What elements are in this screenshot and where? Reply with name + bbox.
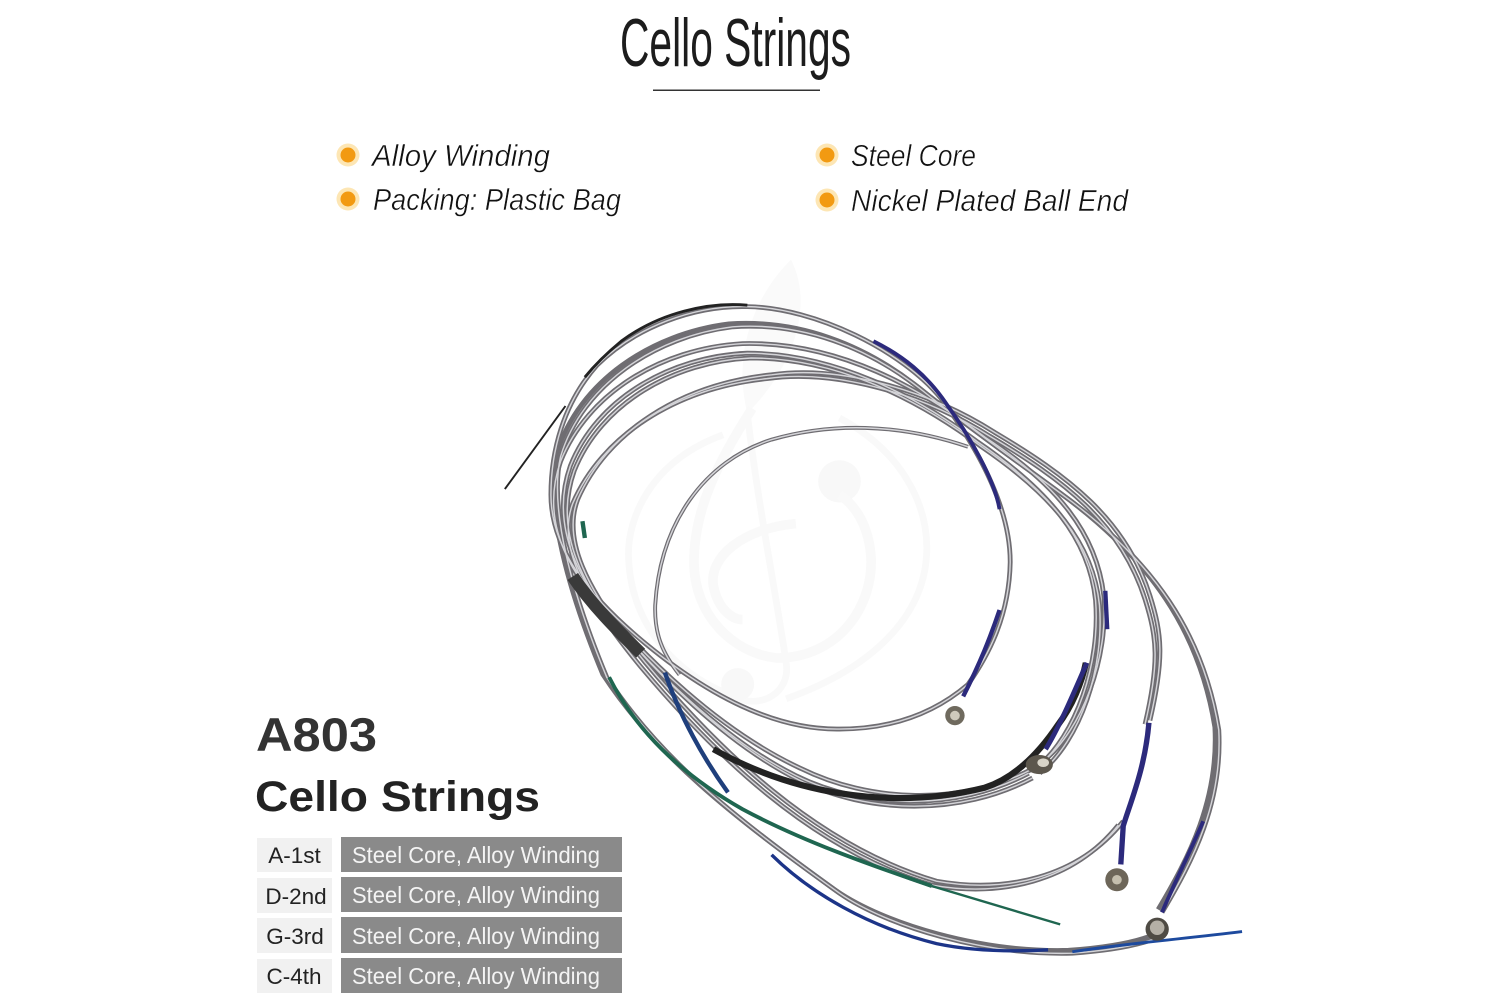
green winding — [582, 521, 1060, 924]
ball end 3 — [1105, 868, 1129, 891]
thin black tail — [505, 406, 565, 489]
string highlights — [551, 307, 1219, 953]
row: D-2nd: D-2nd — [265, 884, 327, 909]
ball ends — [945, 706, 1169, 941]
ball end 4 — [1146, 918, 1169, 941]
row: C-4th — [257, 958, 622, 993]
row: G-3rd — [257, 917, 622, 953]
row: G-3rd: Steel Core, Alloy Winding — [352, 923, 600, 949]
feature: steel core: Steel Core — [851, 138, 976, 173]
row: D-2nd — [257, 877, 622, 913]
row: A-1st: Steel Core, Alloy Winding — [352, 842, 600, 868]
string bodies — [551, 307, 1219, 953]
icon: bullet alloy winding — [336, 144, 360, 166]
string table — [257, 837, 622, 993]
ball end 2 — [1026, 755, 1053, 774]
row: C-4th: Steel Core, Alloy Winding — [352, 963, 600, 989]
row: G-3rd: G-3rd — [266, 924, 324, 949]
icon: bullet steel core — [816, 144, 838, 166]
row: A-1st: A-1st — [268, 843, 322, 868]
ball end 1 — [945, 706, 965, 725]
watermark: treble clef — [628, 260, 927, 701]
icon: bullet nickel plated — [816, 188, 838, 212]
product name: Cello Strings — [255, 773, 540, 821]
black winding segments — [573, 305, 1086, 798]
feature: nickel plated ball end: Nickel Plated Ball End — [851, 183, 1130, 218]
icon: bullet packing — [336, 188, 360, 210]
feature list — [336, 138, 1130, 218]
feature: packing: Packing: Plastic Bag — [373, 182, 621, 217]
row: C-4th: C-4th — [266, 964, 322, 989]
title: Cello Strings — [620, 5, 851, 81]
model number: A803 — [256, 709, 377, 762]
feature: alloy winding: Alloy Winding — [370, 138, 550, 173]
row: D-2nd: Steel Core, Alloy Winding — [352, 882, 600, 908]
row: A-1st — [257, 837, 622, 872]
title underline — [653, 90, 820, 91]
strings photo — [505, 305, 1242, 953]
blue winding — [665, 341, 1242, 952]
